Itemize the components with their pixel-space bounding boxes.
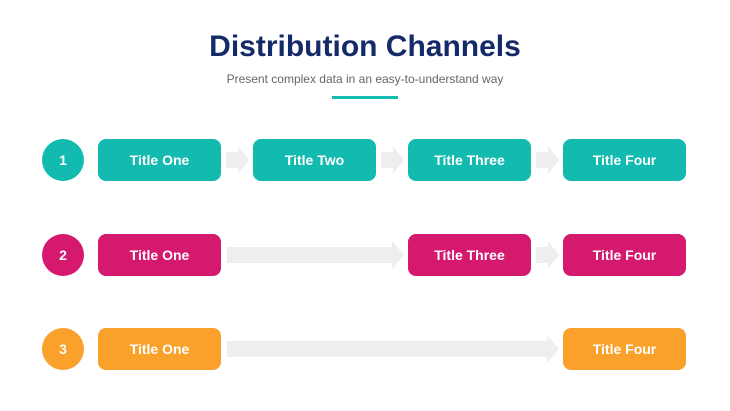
row 3 xyxy=(42,328,686,370)
arrow: row1 b xyxy=(381,146,404,174)
box: Title Four xyxy=(593,341,656,357)
box xyxy=(563,328,686,370)
box: Title One xyxy=(130,152,189,168)
box: Title Two xyxy=(285,152,344,168)
box xyxy=(253,139,376,181)
circle 3 xyxy=(42,328,84,370)
box: Title Three xyxy=(434,152,505,168)
underline accent xyxy=(332,96,398,99)
circle 1: 1 xyxy=(59,152,67,168)
row 1 xyxy=(42,139,686,181)
box: Title Four xyxy=(593,247,656,263)
box: Title One xyxy=(130,341,189,357)
box xyxy=(408,234,531,276)
circle 3: 3 xyxy=(59,341,67,357)
arrow: row1 c xyxy=(536,146,559,174)
arrow: row2 short xyxy=(536,241,559,269)
row 2 xyxy=(42,234,686,276)
arrow: row2 long xyxy=(227,241,404,269)
box xyxy=(98,234,221,276)
box: Title Three xyxy=(434,247,505,263)
circle 1 xyxy=(42,139,84,181)
box xyxy=(98,139,221,181)
box xyxy=(563,139,686,181)
box xyxy=(408,139,531,181)
arrow: row3 long xyxy=(227,335,559,363)
circle 2: 2 xyxy=(59,247,67,263)
box: Title Four xyxy=(593,152,656,168)
arrow: row1 a xyxy=(226,146,249,174)
title: Distribution Channels xyxy=(209,30,521,63)
box: Title One xyxy=(130,247,189,263)
circle 2 xyxy=(42,234,84,276)
box xyxy=(563,234,686,276)
subtitle: Present complex data in an easy-to-understand way xyxy=(227,72,503,86)
box xyxy=(98,328,221,370)
